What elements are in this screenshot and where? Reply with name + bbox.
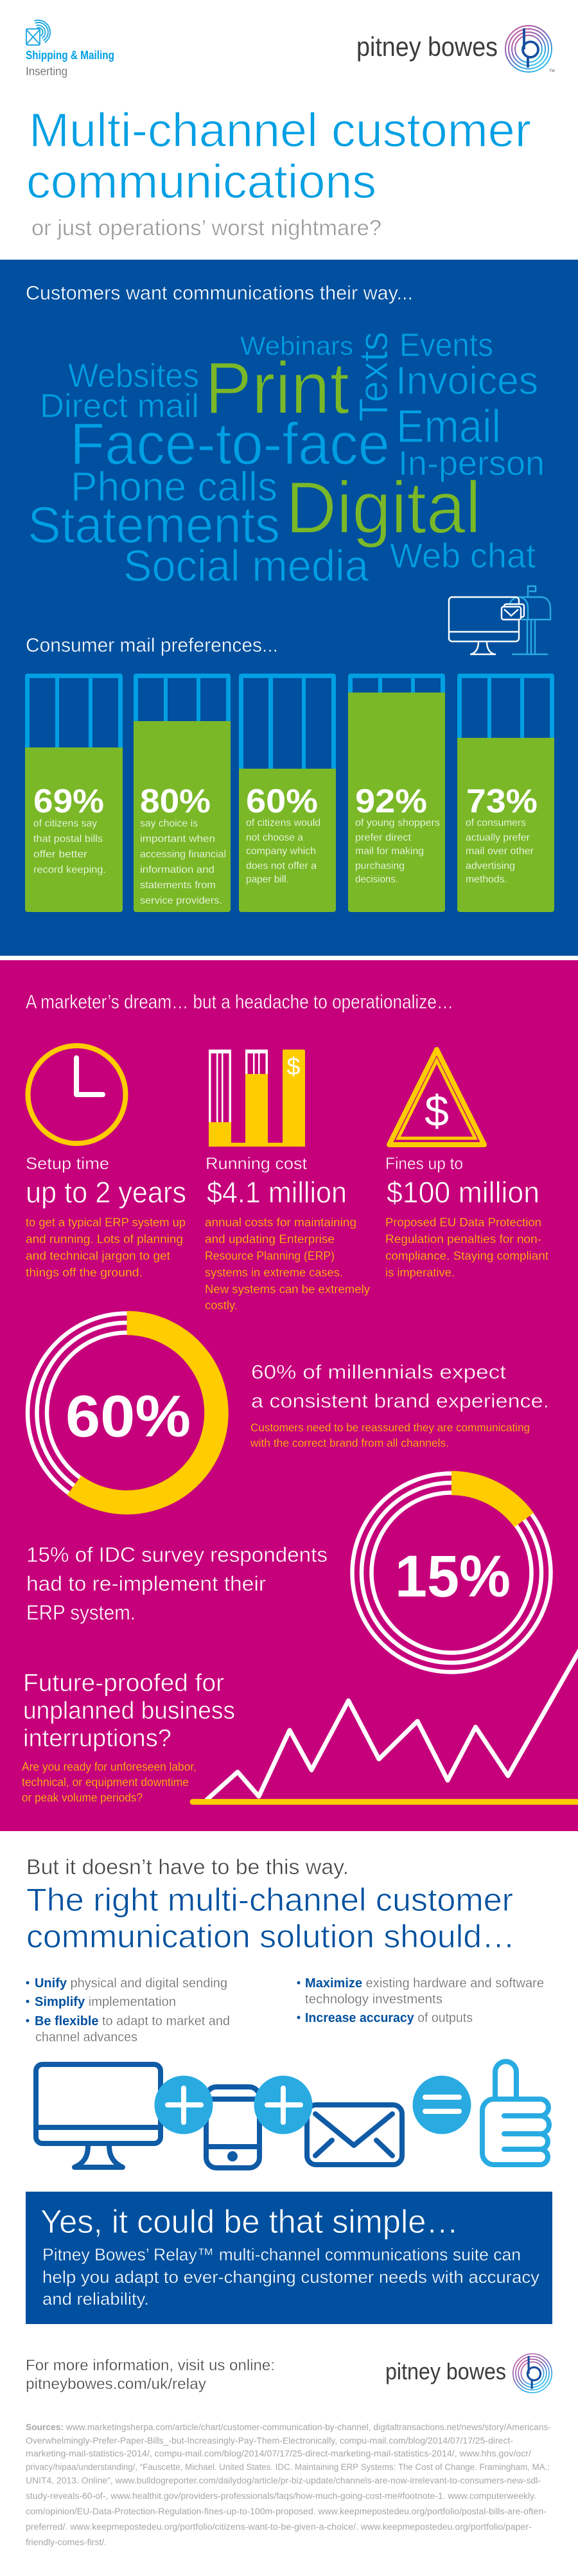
bar: 69%: offer better [33,849,88,860]
word cloud: Web chat [390,537,536,575]
description: and running. Lots of planning [26,1233,183,1246]
bar: 73%: mail over other [466,846,534,857]
description [385,1216,548,1279]
description [26,1216,186,1279]
title [26,103,531,208]
text: 60% of millennials: a consistent brand experience. [251,1390,549,1412]
logo: pitney bowes [356,26,555,73]
text: 15% of IDC respondents: 15% of IDC survey respondents [26,1543,328,1566]
description [205,1216,370,1312]
sources: privacy/hipaa/understanding/, “Fauscette, Michael. United States. IDC. Maintaining ERP Systems: The Cost of Change. Framingham, MA.: [26,2462,550,2472]
text: 60% of millennials [250,1361,549,1449]
icon: plus [154,2076,213,2134]
description: and updating Enterprise [205,1233,335,1246]
icon: plus [254,2076,312,2134]
sources [26,2422,551,2547]
bar: 60%: does not offer a [246,861,317,872]
category label: Shipping & Mailing [26,49,114,62]
icon: warning triangle with dollar [389,1050,484,1145]
logo: pitney bowes footer: pitney bowes [385,2358,506,2384]
callout body [42,2245,540,2309]
icon: phone [206,2087,259,2168]
bullet list right [297,1976,544,2025]
text: future-proofed: unplanned business [23,1697,235,1724]
text: future-proofed: interruptions? [23,1725,171,1752]
footer contact: For more information, visit us online: [26,2357,275,2374]
sources: Sources: www.marketingsherpa.com/article/chart/customer-communication-by-channel, digitaltransactions.net/news/story/Americans- [26,2422,551,2432]
word cloud: Websites [68,357,199,395]
icon: equals [412,2076,471,2134]
bar: 69%: that postal bills [33,834,103,845]
bullet list right: technology investments [305,1992,442,2007]
bullet list left: Simplify implementation [35,1995,176,2009]
text: future-proofed: Future-proofed for [23,1670,224,1697]
icon: clock [28,1046,126,1143]
bullet list left [26,1976,230,2044]
bar: 73%: advertising [466,861,515,872]
sources: study-reveals-60-of-, www.healthit.gov/providers-professionals/faqs/how-much-going-cost-me#footnote-1. www.computerweekly. [26,2491,536,2501]
line chart: volume spikes [190,1647,578,1805]
sources: preferred/. www.keepmepostedeu.org/portfolio/citizens-want-to-be-given-a-choice/. www.keepmepostedeu.org/portfolio/paper- [26,2522,532,2532]
label: running cost: Running cost [206,1154,308,1173]
panel: marketer's dream [0,960,578,1831]
word cloud: Print [205,348,349,429]
bar: 69%: record keeping. [33,864,106,875]
description: annual costs for maintaining [205,1216,356,1229]
value: $4.1 million: $4.1 million [207,1176,347,1209]
description: things off the ground. [26,1266,143,1279]
description: systems in extreme cases. [205,1266,343,1279]
bar: 80% [134,674,231,912]
bullet list left: channel advances [35,2030,137,2044]
word cloud: Social media [123,541,369,591]
sources: marketing-mail-statistics-2014/, compu-mail.com/blog/2014/07/17/25-direct-marketing-mail-statistics-2014/, www.hhs.gov/ocr/ [26,2449,531,2458]
solution section [26,1855,549,2168]
word cloud: Digital [286,467,481,549]
sources: UNIT4, 2013. Online”, www.bulldogreporter.com/dailydog/article/pr-biz-update/channels-are-now-irrelevant-to-consumers-new-sdl- [26,2476,541,2485]
footer contact [26,2357,275,2393]
text: future-proofed: or peak volume periods? [22,1791,143,1804]
bar: 80%: say choice is [140,818,198,829]
bar chart: mail preferences [25,674,554,912]
value: $100 million: $100 million [387,1176,539,1209]
callout heading: Yes, it could be that simple… [40,2203,459,2240]
sub category label: Inserting [26,65,67,78]
description: costly. [205,1299,238,1312]
donut chart: 15%: 15% [395,1544,511,1609]
description: and technical jargon to get [26,1249,170,1262]
text: future-proofed [22,1670,235,1804]
icon: computer and mailbox [449,586,550,654]
bar: 69% [25,674,123,912]
heading: right solution: communication solution should… [26,1919,515,1954]
word cloud [28,326,545,591]
word cloud: Email [396,401,501,452]
bar: 60%: not choose a [246,832,303,843]
icon: cost bars [209,1050,305,1147]
bullet list left: Unify physical and digital sending [35,1976,227,1990]
column: setup time [26,1046,186,1279]
bar: 69%: of citizens say [33,818,97,829]
word cloud: Phone calls [71,463,277,510]
bar: 92% [348,674,445,912]
sources: Overwhelmingly-Prefer-Paper-Bills_-but-Increasingly-Pay-Them-Electronically, compu-mail.com/blog/2014/07/17/25-direct- [26,2436,513,2446]
footer contact: pitneybowes.com/uk/relay [26,2375,206,2393]
description: Regulation penalties for non- [385,1233,541,1246]
title: Multi-channel customer [29,103,531,157]
icon: warning triangle with dollar: $ [425,1087,449,1136]
word cloud: Statements [28,496,280,553]
bar: 92%: prefer direct [355,832,412,843]
bullet list right: Maximize existing hardware and software [305,1976,544,1990]
icon: cost bars: $ [286,1053,301,1080]
description: to get a typical ERP system up [26,1216,186,1229]
bar: 80%: service providers. [140,895,222,906]
panel: customers want communications [0,260,578,956]
bar: 73% [457,674,554,912]
title: communications [26,155,376,208]
word cloud: Face-to-face [70,411,390,477]
bar: 73%: actually prefer [466,832,530,843]
word cloud: Events [399,326,493,363]
bar: 92%: mail for making [355,846,424,857]
bar: 60%: paper bill. [246,874,289,885]
bar: 60%: company which [246,846,316,857]
word cloud: Webinars [240,331,353,361]
description: compliance. Staying compliant [385,1249,548,1262]
callout body: help you adapt to ever-changing customer needs with accuracy [42,2267,540,2287]
bar: 92%: purchasing [355,861,405,872]
word cloud: Texts [351,332,396,422]
bar: 60%: of citizens would [246,818,320,828]
bar: 73%: of consumers [466,818,526,828]
heading: consumer mail preferences: Consumer mail preferences... [26,634,278,656]
donut chart: 60%: 60% [66,1384,191,1449]
text: 15% of IDC respondents: had to re-implement their [26,1572,266,1595]
logo: pitney bowes footer [385,2354,552,2393]
description: Resource Planning (ERP) [205,1249,335,1262]
sources: com/opinion/EU-Data-Protection-Regulation-fines-up-to-100m-proposed. www.keepmepostedeu.org/portfolio/postal-bills-are-often- [26,2507,547,2516]
bar: 92%: decisions. [355,874,398,885]
icon: envelope [307,2105,402,2165]
description: New systems can be extremely [205,1283,370,1296]
icon: thumbs up [482,2062,549,2165]
bullet list left: Be flexible to adapt to market and [35,2014,230,2028]
heading: right solution [26,1882,515,1954]
callout body: and reliability. [42,2289,149,2309]
bar: 92%: of young shoppers [355,818,440,828]
bar: 92%: 92% [355,783,427,820]
text: 15% of IDC respondents: ERP system. [26,1601,136,1624]
bar: 80%: statements from [140,880,216,891]
callout: yes it could be that simple [26,2192,552,2324]
text: future-proofed: Are you ready for unforeseen labor, [22,1760,197,1773]
bullet list right: Increase accuracy of outputs [305,2011,473,2025]
sources: friendly-comes-first/. [26,2537,107,2547]
logo: pitney bowes: pitney bowes [356,31,498,62]
text: 15% of IDC respondents [26,1543,328,1624]
column: fines [385,1050,548,1279]
donut chart: 60% [28,1314,226,1512]
description: is imperative. [385,1266,455,1279]
text: future-proofed: technical, or equipment downtime [22,1776,189,1789]
label: setup time: Setup time [26,1154,109,1173]
icon: envelope with signal arcs [26,20,50,45]
callout body: Pitney Bowes’ Relay™ multi-channel communications suite can [42,2245,521,2264]
text: 60% of millennials: 60% of millennials expect [251,1361,506,1383]
heading: marketer's dream: A marketer’s dream… but a headache to operationalize… [26,990,453,1013]
bar: 80%: important when [140,834,215,845]
bar: 60%: 60% [246,783,318,820]
word cloud: Invoices [396,359,538,402]
subtitle: or just operations’ worst nightmare? [31,216,381,240]
bar: 69%: 69% [33,783,104,820]
text: 60% of millennials: Customers need to be reassured they are communicating [250,1421,530,1434]
bar: 80%: accessing financial [140,849,226,860]
bar: 60% [239,674,336,912]
logo: pitney bowes: TM [549,69,555,73]
word cloud: In-person [398,444,545,483]
description: Proposed EU Data Protection [385,1216,541,1229]
heading: right solution: The right multi-channel customer [26,1882,513,1918]
value: up to 2 years: up to 2 years [26,1176,186,1209]
bar: 73%: methods. [466,874,507,885]
heading: but it doesn't have to be: But it doesn’t have to be this way. [26,1855,349,1879]
bar: 80%: information and [140,864,215,875]
donut chart: 15% [352,1473,551,1672]
bar: 73%: 73% [466,783,538,820]
word cloud: Direct mail [40,388,199,425]
icon: monitor [36,2064,161,2167]
text: 60% of millennials: with the correct brand from all channels. [250,1436,449,1449]
heading: customers want: Customers want communications their way... [26,282,413,304]
label: fines up to: Fines up to [385,1154,463,1173]
header [26,20,555,240]
equation icons [36,2062,549,2168]
bar: 80%: 80% [140,783,211,820]
column: running cost [205,1050,370,1312]
